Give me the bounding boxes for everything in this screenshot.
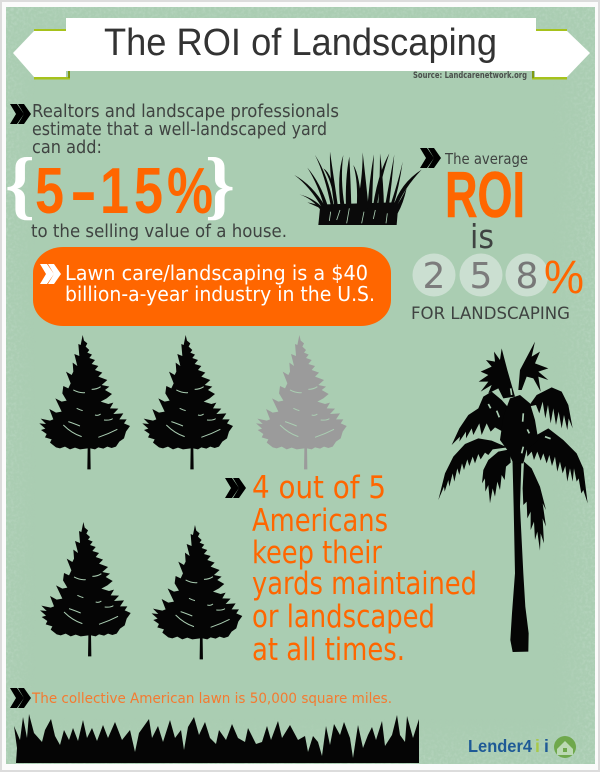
text: is: is — [470, 217, 494, 256]
text: the average: The average — [444, 150, 528, 168]
icon: chevron — [225, 478, 246, 498]
title: The ROI of Landscaping — [104, 22, 497, 64]
icon: palm tree — [438, 342, 588, 652]
figure: 258 percent: % — [544, 250, 584, 303]
closing text: to the selling value of a house. — [31, 221, 287, 242]
icon: chevron — [10, 104, 31, 124]
intro text: Realtors and landscape professionals — [32, 101, 339, 122]
tree 3 grey — [256, 335, 347, 469]
stat text: Americans — [252, 503, 388, 539]
figure: 258 percent: 5 — [470, 256, 492, 297]
lawn silhouette — [14, 714, 419, 763]
source credit: Source: Landcarenetwork.org — [413, 71, 527, 81]
tree 1 — [39, 335, 130, 469]
figure: 5-15% — [35, 154, 213, 227]
stat text: 4 out of 5 — [252, 470, 386, 506]
callout text: Lawn care/landscaping is a $40 — [65, 261, 368, 285]
stat text: yards maintained — [252, 566, 477, 602]
intro text: can add: — [32, 137, 102, 158]
icon: grass tuft — [294, 152, 422, 225]
stat block: selling value — [5, 101, 339, 242]
icon: white chevron — [40, 264, 61, 284]
title banner — [13, 18, 590, 80]
intro text — [32, 101, 339, 158]
tree 4 — [40, 522, 131, 656]
lawn text: The collective American lawn is 50,000 square miles. — [31, 691, 392, 707]
tree pictogram: five trees, one grey — [39, 335, 347, 659]
logo: Lender4: i — [544, 736, 549, 756]
intro text: estimate that a well-landscaped yard — [32, 119, 327, 140]
stat block: average ROI — [411, 148, 584, 324]
stat block: american lawn — [10, 688, 392, 708]
stat block: four out of five — [225, 470, 477, 668]
figure: 5-15%: 1 — [100, 154, 129, 227]
icon: chevron — [420, 148, 441, 168]
figure: 5-15%: - — [70, 154, 97, 227]
stat text — [252, 470, 477, 668]
figure: 5-15%: 5 — [35, 154, 64, 227]
tree 5 — [152, 525, 242, 659]
logo: Lender4 — [468, 736, 576, 758]
icon: house — [554, 736, 576, 758]
logo: Lender4: i — [535, 736, 540, 756]
figure: 258 percent — [412, 250, 584, 303]
figure: 258 percent: 2 — [423, 256, 445, 297]
callout: industry size — [33, 247, 391, 326]
figure: ROI: ROI — [445, 158, 525, 231]
stat text: at all times. — [252, 632, 405, 668]
figure: 5-15%: 5 — [134, 154, 163, 227]
figure: 258 percent: 8 — [516, 256, 538, 297]
tree 2 — [142, 335, 233, 469]
icon: chevron — [10, 688, 31, 708]
figure: 5-15%: % — [167, 154, 213, 227]
logo: Lender4: Lender4 — [468, 736, 532, 756]
callout text — [65, 261, 375, 306]
stat text: or landscaped — [252, 599, 435, 635]
callout text: billion-a-year industry in the U.S. — [65, 282, 375, 306]
text: for landscaping: FOR LANDSCAPING — [411, 304, 570, 324]
right brace: } — [205, 143, 235, 227]
stat text: keep their — [252, 535, 382, 571]
left brace: { — [5, 143, 35, 227]
